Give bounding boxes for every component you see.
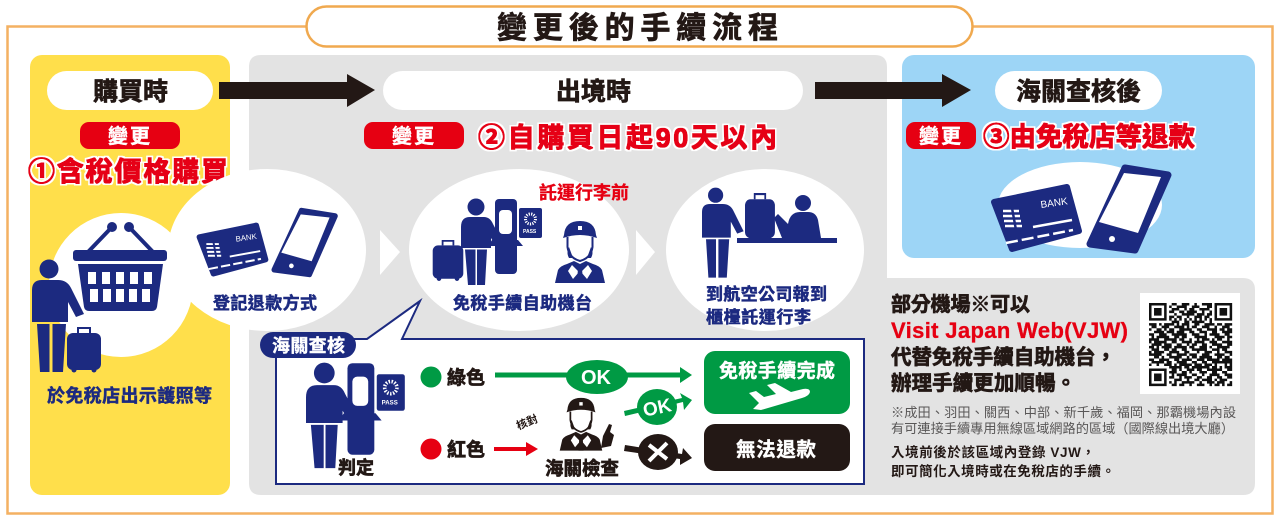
icon: suitcase (745, 194, 775, 241)
text: register refund method: 登記退款方式 (213, 293, 317, 313)
heading: departure (383, 71, 803, 110)
result: no refund (704, 424, 850, 471)
result: completed: 免稅手續完成 (719, 359, 835, 382)
text: airline counter: 櫃檯託運行李 (706, 307, 811, 327)
after customs contents (906, 71, 1195, 250)
change badge 3: 變更 (919, 124, 961, 148)
text block: Visit Japan Web (891, 293, 1128, 395)
change badge 3 (906, 122, 976, 149)
heading: at purchase (47, 71, 213, 110)
step 2 heading: ②自購買日起90天以內 (478, 123, 777, 153)
icon: kiosk judgement (306, 363, 405, 468)
note: register VJW: 入境前後於該區域內登錄 VJW， (891, 444, 1095, 460)
arrow: green OK: OK (581, 367, 612, 389)
icon: bank card and phone: BANK (235, 232, 258, 244)
arrow: green OK (495, 360, 692, 394)
text: kiosk: 免稅手續自助機台 (453, 293, 592, 313)
icon: bank card and phone (199, 211, 335, 274)
change badge 1 (80, 122, 180, 149)
icon: kiosk judgement: PASS (382, 400, 398, 407)
bubble backdrop (998, 162, 1162, 248)
footnote: airports (891, 405, 1236, 436)
heading: departure: 出境時 (556, 78, 631, 106)
icon: bank card and phone: BANK (1040, 196, 1069, 211)
change badge 2 (364, 122, 464, 149)
text block: Visit Japan Web: 代替免稅手續自助機台， (891, 345, 1116, 369)
heading: after customs (995, 71, 1162, 110)
icon: bank card and phone (994, 168, 1168, 250)
arrow: inspection rejected (624, 434, 692, 470)
text: show passport: 於免稅店出示護照等 (47, 385, 212, 406)
text: airline counter (706, 284, 827, 327)
icon: traveller (32, 260, 84, 372)
text: airline counter: 到航空公司報到 (706, 284, 827, 304)
icon: traveller (702, 188, 744, 278)
green route label (420, 366, 485, 389)
title: 變更後的手續流程 (497, 12, 778, 45)
step 3 heading: ③由免稅店等退款 (983, 122, 1195, 152)
arrow: to after customs (815, 74, 971, 107)
tag: customs check: 海關查核 (272, 335, 345, 356)
bubble: airline check-in (666, 169, 864, 331)
red route label (420, 438, 485, 461)
result: no refund: 無法退款 (736, 438, 816, 461)
panel: departure and customs (249, 55, 1255, 495)
icon: basket (73, 222, 167, 311)
text: verify: 核對 (514, 411, 540, 433)
arrow: to departure (219, 74, 375, 107)
footnote: airports: 有可連接手續專用無線區域網路的區域（國際線出境大廳） (891, 420, 1234, 436)
icon: suitcase (433, 241, 463, 281)
text block: Visit Japan Web: 部分機場※可以 (891, 293, 1030, 316)
text: judgement: 判定 (338, 457, 374, 478)
chevron 1 (380, 230, 400, 275)
text block: Visit Japan Web: 辦理手續更加順暢。 (891, 372, 1076, 395)
panel: at purchase (28, 55, 230, 495)
change badge 1: 變更 (108, 124, 150, 148)
QR code (1140, 293, 1240, 394)
chevron 2 (636, 230, 655, 275)
label: before check-in: 託運行李前 (539, 183, 629, 203)
bubble: self-service kiosk (409, 169, 629, 331)
text block: Visit Japan Web: Visit Japan Web(VJW) (891, 318, 1128, 343)
heading: at purchase: 購買時 (93, 78, 168, 106)
bubble: register refund method (168, 169, 366, 331)
red route label: 紅色 (447, 439, 485, 461)
icon: plane (749, 383, 810, 410)
icon: suitcase (67, 328, 101, 372)
icon: inspecting officer (560, 398, 614, 451)
arrow: inspection OK: OK (641, 395, 674, 422)
icon: customs officer (555, 221, 605, 283)
change badge 2: 變更 (392, 124, 434, 148)
arrow: inspection OK (624, 389, 692, 425)
text: pass: PASS (523, 229, 537, 235)
bubble: passport and basket (32, 213, 193, 372)
panel: customs check (260, 301, 864, 484)
icon: counter agent (737, 195, 837, 243)
step 1 heading: ①含稅價格購買 (28, 157, 228, 187)
footnote: airports: ※成田、羽田、關西、中部、新千歲、福岡、那霸機場內設 (891, 405, 1236, 420)
tag: customs check (260, 332, 356, 358)
panel: after customs (902, 55, 1255, 258)
title (306, 6, 972, 46)
icon: person at kiosk (461, 198, 542, 285)
note: register VJW (891, 444, 1115, 479)
result: completed (704, 351, 850, 414)
note: register VJW: 即可簡化入境時或在免稅店的手續。 (891, 463, 1115, 479)
green route label: 綠色 (447, 367, 485, 389)
heading: after customs: 海關查核後 (1016, 78, 1141, 106)
text: customs inspection: 海關檢查 (545, 458, 619, 479)
arrow: red to inspection (494, 442, 538, 456)
